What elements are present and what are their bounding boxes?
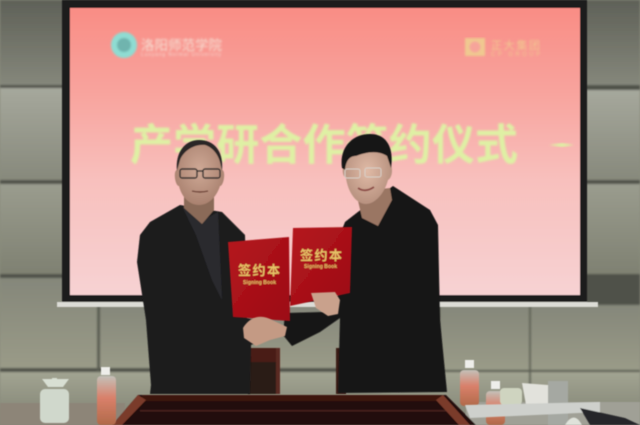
logo: Luoyang Normal University: Luoyang Normal University — [141, 52, 222, 58]
logo: CP Group: 正大集团 — [491, 38, 540, 52]
decorative screen mark — [549, 143, 574, 147]
water bottles right — [460, 360, 505, 425]
glasses — [345, 168, 381, 178]
suit — [283, 186, 447, 393]
conference table — [0, 395, 640, 425]
handshake — [243, 292, 340, 346]
mouth — [358, 187, 374, 190]
logo: CP Group: CP GROUP — [491, 52, 540, 58]
desk items right — [465, 381, 640, 425]
right man — [283, 134, 447, 393]
projection screen — [57, 0, 598, 307]
signing book right: Signing Book — [304, 264, 337, 270]
signing book left — [228, 237, 290, 321]
signing book right — [290, 227, 352, 306]
logo: CP Group — [465, 38, 540, 58]
neck — [356, 188, 392, 226]
left man — [137, 140, 262, 394]
glasses — [180, 169, 220, 178]
title: 产学研合作签约仪式 — [130, 122, 518, 170]
hair — [342, 134, 392, 170]
mouth — [192, 191, 208, 192]
suit — [137, 205, 262, 394]
chairs — [248, 348, 346, 394]
logo: Luoyang Normal University — [111, 32, 222, 58]
signing book left: Signing Book — [243, 280, 276, 286]
screen ledge — [57, 302, 598, 307]
head — [175, 141, 224, 205]
shirt — [182, 206, 222, 300]
right man's left hand on book — [311, 292, 340, 316]
teacup — [40, 378, 69, 423]
head — [343, 138, 392, 204]
signing book left: 签约本 — [238, 263, 280, 278]
signing book right: 签约本 — [300, 248, 342, 263]
neck — [184, 192, 214, 224]
water bottle left — [97, 367, 116, 425]
logo: Luoyang Normal University: 洛阳师范学院 — [141, 38, 222, 53]
hair — [177, 140, 222, 171]
